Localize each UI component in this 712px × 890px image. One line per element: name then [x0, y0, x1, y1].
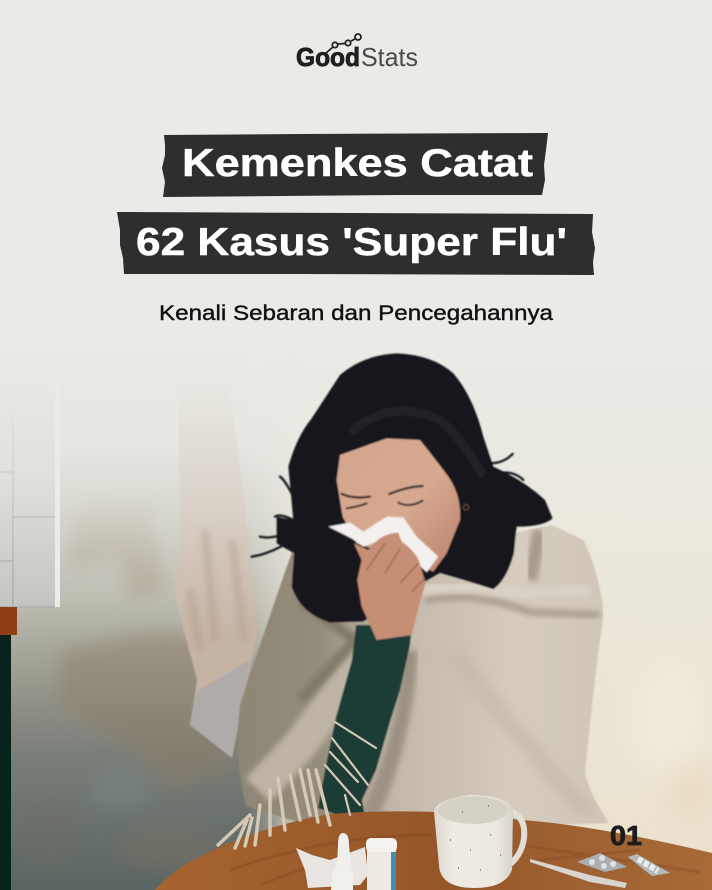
mug speckles	[450, 806, 501, 870]
photo: wall background	[0, 404, 712, 890]
mug	[434, 795, 524, 888]
hair	[277, 353, 553, 623]
tissue on table	[296, 847, 368, 888]
facial features	[342, 486, 469, 510]
hand	[354, 533, 426, 640]
title tape line 2	[117, 212, 595, 275]
logo: GoodStats	[296, 34, 418, 72]
blanket fringe	[218, 722, 376, 848]
finger lines	[367, 543, 425, 592]
hair strands	[252, 454, 523, 557]
subtitle: Kenali Sebaran dan Pencegahannya	[159, 302, 553, 325]
title tape line 2: 62 Kasus 'Super Flu'	[136, 221, 567, 264]
icon: rising line graph	[326, 34, 361, 53]
medicine bottle	[366, 838, 397, 890]
logo wordmark: Good	[296, 42, 360, 72]
thermometer	[530, 859, 627, 888]
table grain	[230, 835, 700, 885]
blanket	[238, 525, 609, 832]
white tile panel	[0, 345, 60, 608]
tissue	[328, 517, 438, 572]
page number: 01	[610, 820, 642, 851]
green sleeve	[318, 625, 412, 818]
logo wordmark: Stats	[361, 42, 418, 72]
photo: woman blowing her nose	[238, 353, 609, 832]
blister pack 1	[577, 853, 627, 872]
towel	[176, 370, 258, 758]
shelf and green strip	[0, 607, 17, 890]
wall stains	[22, 500, 235, 870]
blanket folds	[258, 530, 600, 815]
nasal spray	[331, 833, 353, 890]
blister pack 2	[628, 854, 670, 876]
hair highlight	[350, 411, 483, 477]
title tape line 1	[162, 133, 548, 197]
table	[155, 811, 712, 890]
face	[337, 438, 460, 572]
title tape line 1: Kemenkes Catat	[182, 142, 533, 185]
